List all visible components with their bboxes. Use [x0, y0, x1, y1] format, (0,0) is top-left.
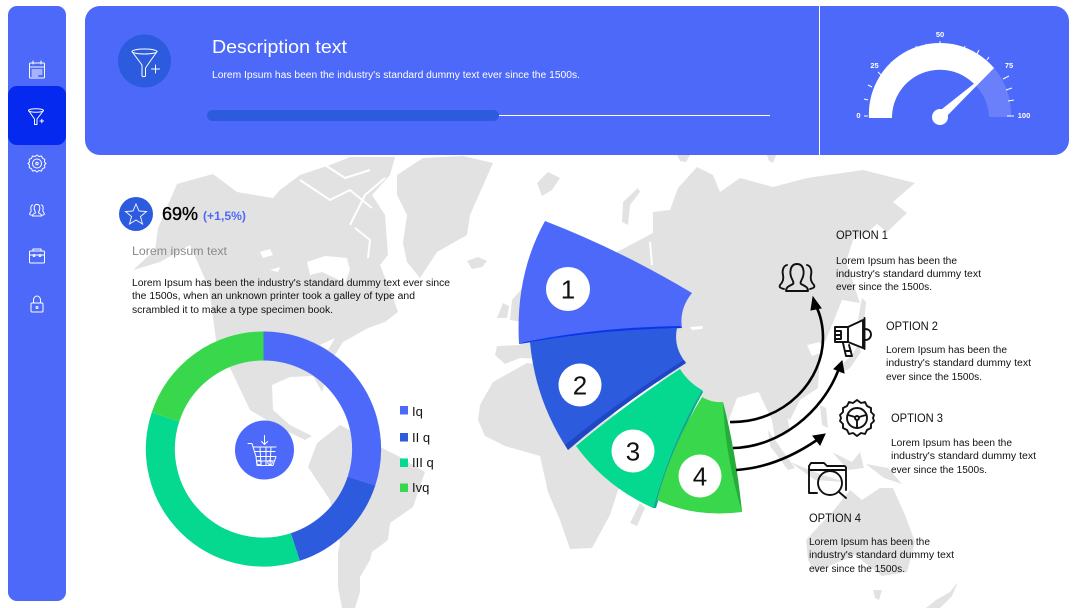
- legend: Iq: [412, 404, 423, 419]
- icon: folder with magnifier: [809, 463, 846, 498]
- gauge chart: [856, 30, 1030, 125]
- text block: summary: scrambled it to make a type specimen book.: [132, 305, 333, 316]
- text: description body: Lorem Ipsum has been the industry's standard dummy text ever since the 1500s.: [212, 70, 580, 81]
- text block: option 1: OPTION 1: [836, 228, 888, 242]
- segment: III q: [160, 417, 295, 552]
- text block: option 3: OPTION 3: [891, 411, 943, 425]
- legend: II q: [412, 430, 430, 445]
- gauge chart: 75: [1005, 61, 1013, 70]
- text block: option 1: ever since the 1500s.: [836, 282, 932, 293]
- legend: Ivq: [412, 480, 429, 495]
- segment: I q: [264, 346, 367, 481]
- gauge chart: 50: [936, 30, 944, 39]
- segment: IV q: [166, 346, 264, 417]
- progress bar: [207, 110, 770, 121]
- text block: option 3: [891, 411, 1036, 476]
- heading: description: Description text: [212, 37, 347, 57]
- arrow: to option 2: [733, 361, 844, 448]
- icon: briefcase: [30, 249, 44, 263]
- donut chart: [160, 346, 367, 552]
- segment: II q: [295, 481, 362, 547]
- text block: option 1: industry's standard dummy text: [836, 269, 981, 280]
- badge 4: 4: [693, 462, 707, 492]
- subheading: Lorem ipsum text: [132, 244, 228, 258]
- text block: summary: [132, 278, 450, 316]
- text block: option 3: Lorem Ipsum has been the: [891, 438, 1012, 449]
- text block: option 3: ever since the 1500s.: [891, 465, 987, 476]
- text block: summary: Lorem Ipsum has been the industry's standard dummy text ever since: [132, 278, 450, 289]
- badge 3: 3: [626, 436, 640, 466]
- badge 2: [558, 364, 602, 406]
- icon: people: [30, 204, 44, 216]
- text block: option 4: Lorem Ipsum has been the: [809, 537, 930, 548]
- badge 1: [546, 267, 590, 311]
- fan segment 2: [530, 328, 686, 450]
- stat: 69%: 69%: [162, 204, 198, 224]
- gauge chart: 25: [870, 61, 879, 70]
- text block: option 3: industry's standard dummy text: [891, 451, 1036, 462]
- text block: option 4: [809, 511, 954, 575]
- icon: calendar: [30, 61, 44, 78]
- text block: option 2: ever since the 1500s.: [886, 372, 982, 383]
- fan segment 1: [519, 221, 692, 344]
- legend: III q: [412, 455, 434, 470]
- text block: option 2: OPTION 2: [886, 319, 938, 333]
- arrow: to option 3: [736, 434, 825, 470]
- icon: megaphone: [835, 318, 871, 356]
- arrow: to option 1: [730, 297, 823, 422]
- legend: [400, 404, 434, 495]
- active sidebar tab: [8, 86, 66, 145]
- icon: funnel badge: [118, 34, 171, 88]
- header divider: [819, 6, 820, 155]
- header panel: [85, 6, 1069, 155]
- icon: star badge: [119, 197, 153, 231]
- text block: option 1: Lorem Ipsum has been the: [836, 256, 957, 267]
- radial fan diagram: [519, 221, 742, 514]
- icon: gear with steering wheel: [840, 400, 874, 436]
- icon: shopping cart badge: [235, 420, 294, 480]
- badge 1: 1: [561, 274, 575, 304]
- text block: option 4: OPTION 4: [809, 511, 861, 525]
- icon: gear: [28, 155, 46, 172]
- sidebar panel: [8, 6, 66, 601]
- badge 4: [678, 454, 722, 498]
- gauge chart: 0: [856, 111, 861, 120]
- icon: lock: [31, 296, 43, 312]
- text block: option 2: [886, 319, 1031, 383]
- icon: funnel: [28, 109, 44, 124]
- badge 2: 2: [573, 370, 587, 400]
- text block: option 4: ever since the 1500s.: [809, 564, 905, 575]
- text block: option 2: industry's standard dummy text: [886, 358, 1031, 369]
- text block: option 4: industry's standard dummy text: [809, 550, 954, 561]
- text block: summary: the 1500s, when an unknown printer took a galley of type and: [132, 291, 415, 302]
- icon: people: [780, 264, 814, 291]
- fan segment 3: [576, 369, 702, 508]
- badge 3: [612, 430, 654, 472]
- stat change: (+1,5%): [203, 209, 246, 223]
- fan segment 4: [657, 397, 742, 514]
- world map background: [133, 155, 958, 608]
- gauge chart: 100: [1018, 111, 1030, 120]
- text block: option 2: Lorem Ipsum has been the: [886, 345, 1007, 356]
- text block: option 1: [836, 228, 981, 293]
